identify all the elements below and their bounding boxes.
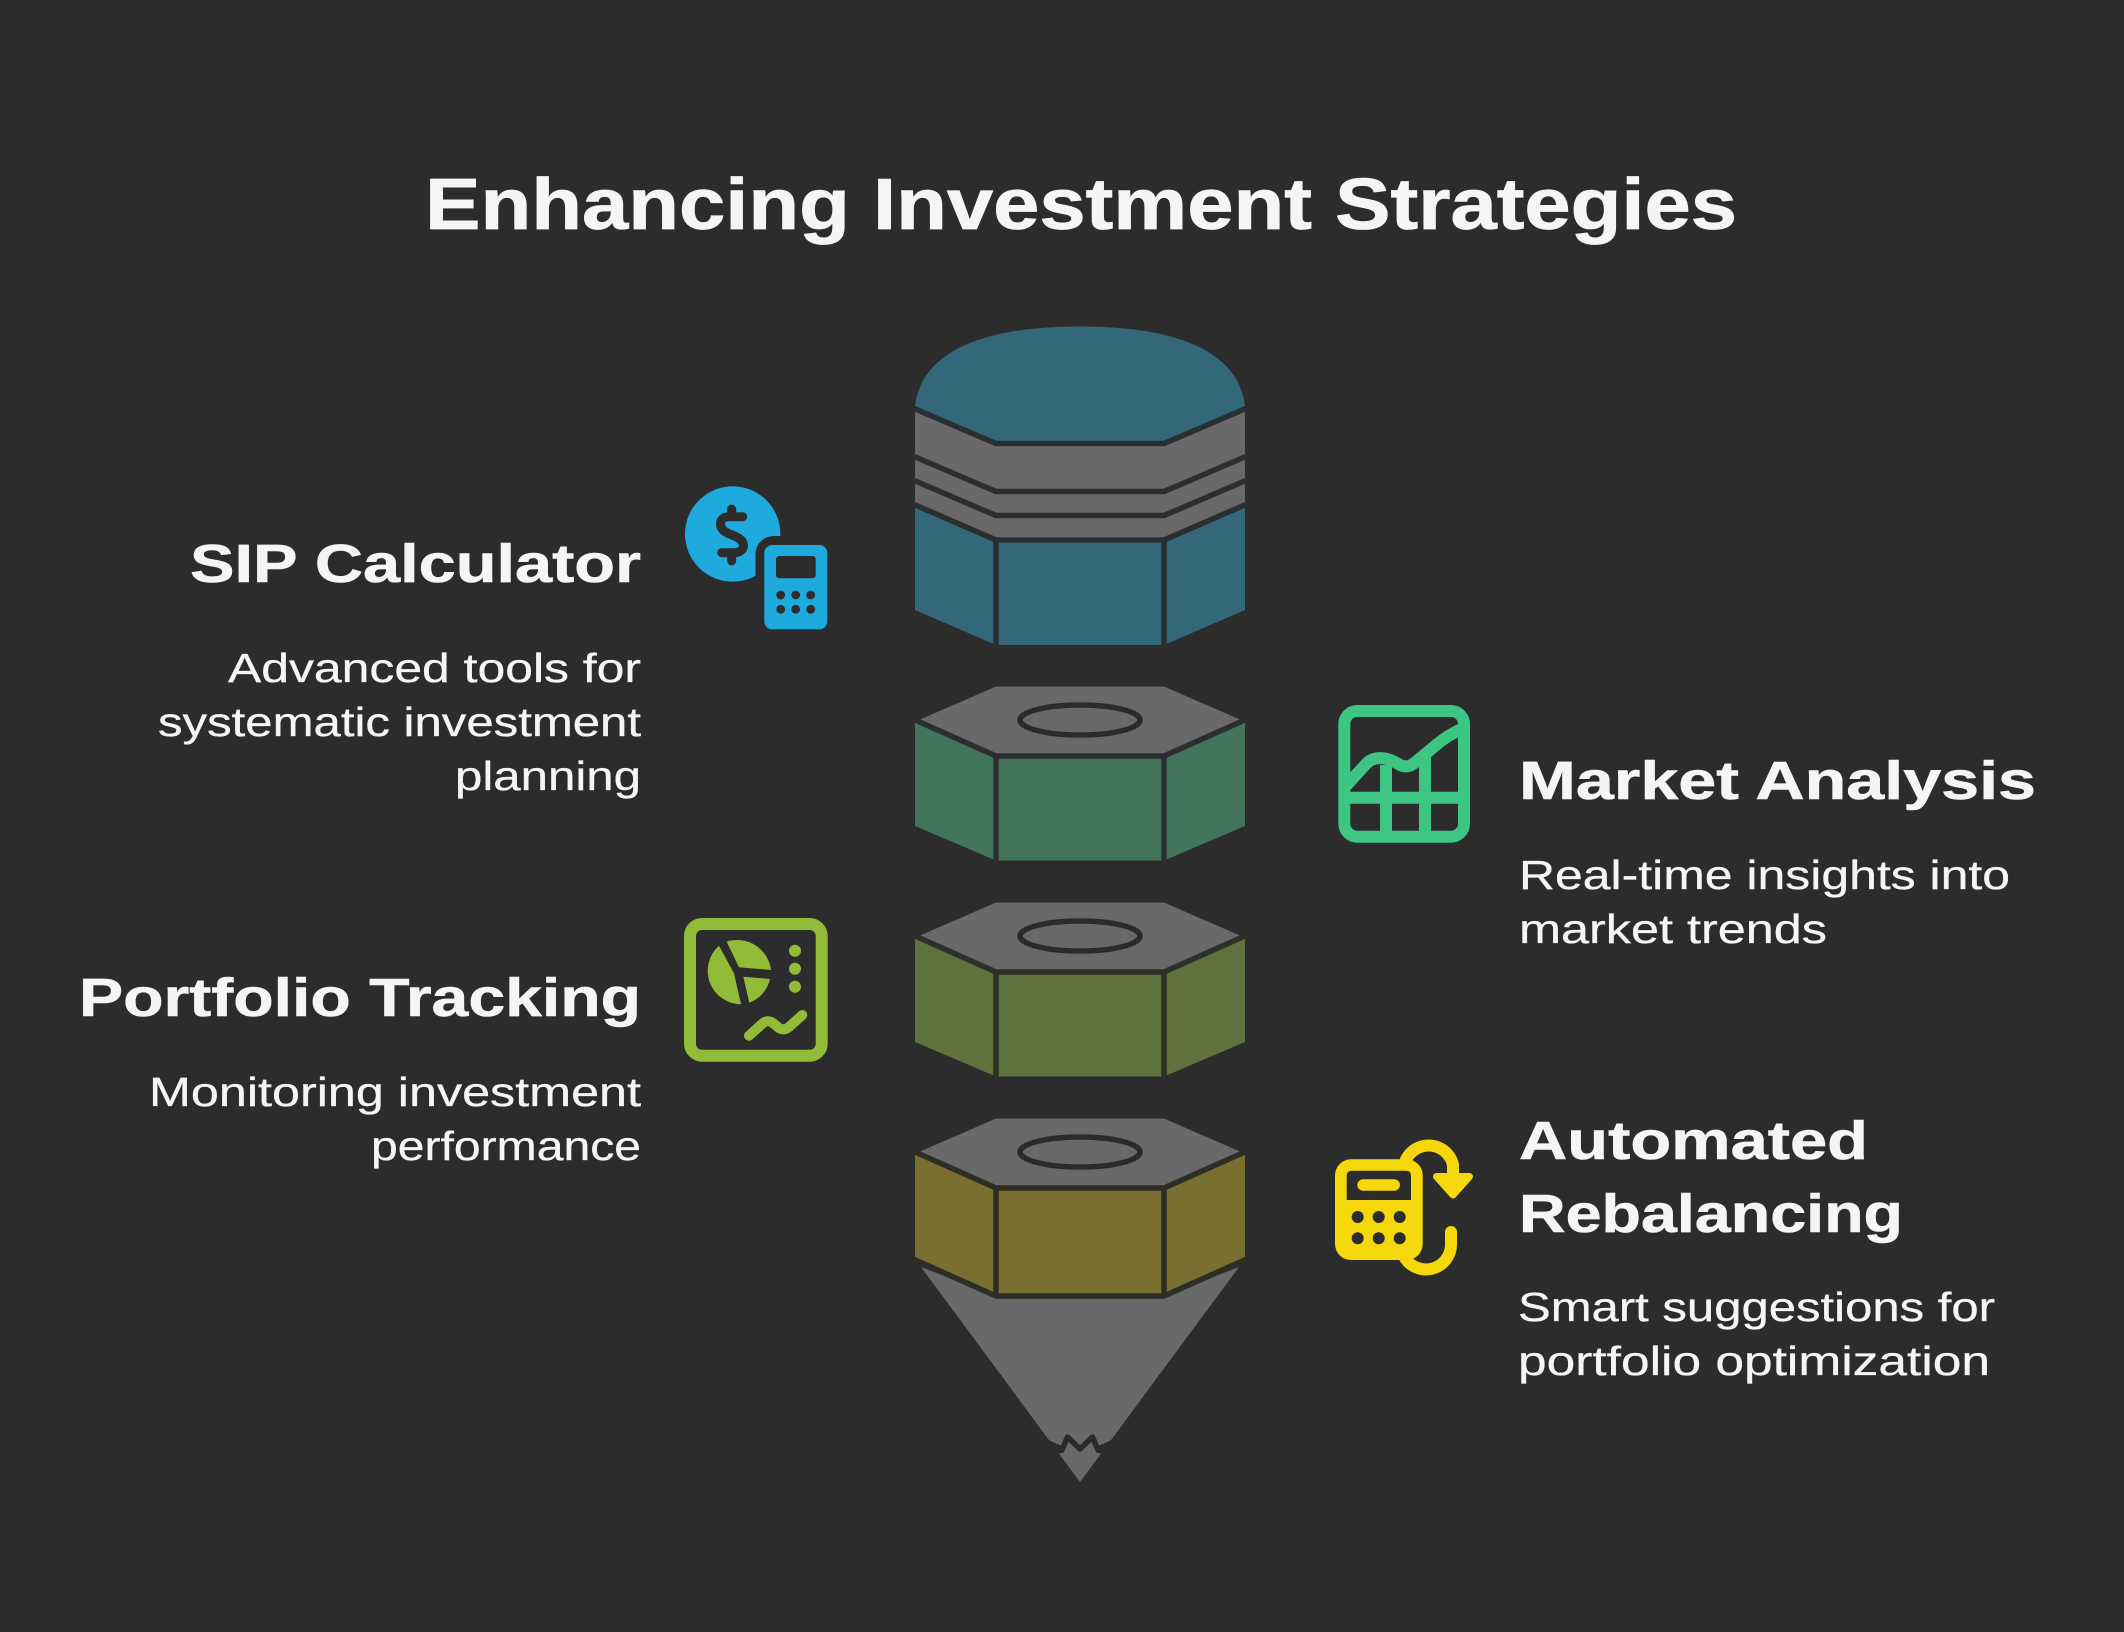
- icon: automated rebalancing calculator: [1335, 1145, 1470, 1269]
- pencil section: cone tip: [921, 1267, 1239, 1482]
- text: Automated Rebalancing description: portfolio optimization: [1518, 1338, 1990, 1384]
- pencil section: green nut: [913, 686, 1247, 862]
- pencil section: olive green nut: [913, 902, 1247, 1078]
- title: Enhancing Investment Strategies: [425, 165, 1737, 245]
- heading: Automated Rebalancing: Rebalancing: [1519, 1184, 1903, 1244]
- heading: Market Analysis: Market Analysis: [1519, 751, 2036, 811]
- text: SIP Calculator description: Advanced tools for: [228, 645, 641, 691]
- text: SIP Calculator description: systematic investment: [158, 699, 642, 745]
- pencil section: yellow nut: [913, 1118, 1247, 1296]
- text: Automated Rebalancing description: [1518, 1284, 1995, 1384]
- heading: Automated Rebalancing: [1519, 1111, 1903, 1244]
- text: SIP Calculator description: [158, 645, 642, 799]
- icon: dollar coin and calculator: [685, 486, 846, 646]
- text: Market Analysis description: Real-time insights into: [1519, 852, 2010, 898]
- heading: SIP Calculator: SIP Calculator: [190, 534, 641, 594]
- text: Portfolio Tracking description: Monitoring investment: [149, 1069, 642, 1115]
- icon: market analysis chart: [1344, 711, 1464, 837]
- text: Market Analysis description: [1519, 852, 2010, 952]
- central pencil diagram: [913, 326, 1247, 1482]
- text: Automated Rebalancing description: Smart suggestions for: [1518, 1284, 1995, 1330]
- icon: portfolio dashboard: [690, 924, 822, 1056]
- heading: Portfolio Tracking: Portfolio Tracking: [79, 968, 641, 1028]
- heading: Automated Rebalancing: Automated: [1519, 1111, 1868, 1171]
- text: Portfolio Tracking description: performance: [371, 1123, 641, 1169]
- text: Market Analysis description: market trends: [1519, 906, 1827, 952]
- text: SIP Calculator description: planning: [455, 753, 641, 799]
- text: Portfolio Tracking description: [149, 1069, 642, 1169]
- pencil section: blue eraser cap: [913, 326, 1247, 647]
